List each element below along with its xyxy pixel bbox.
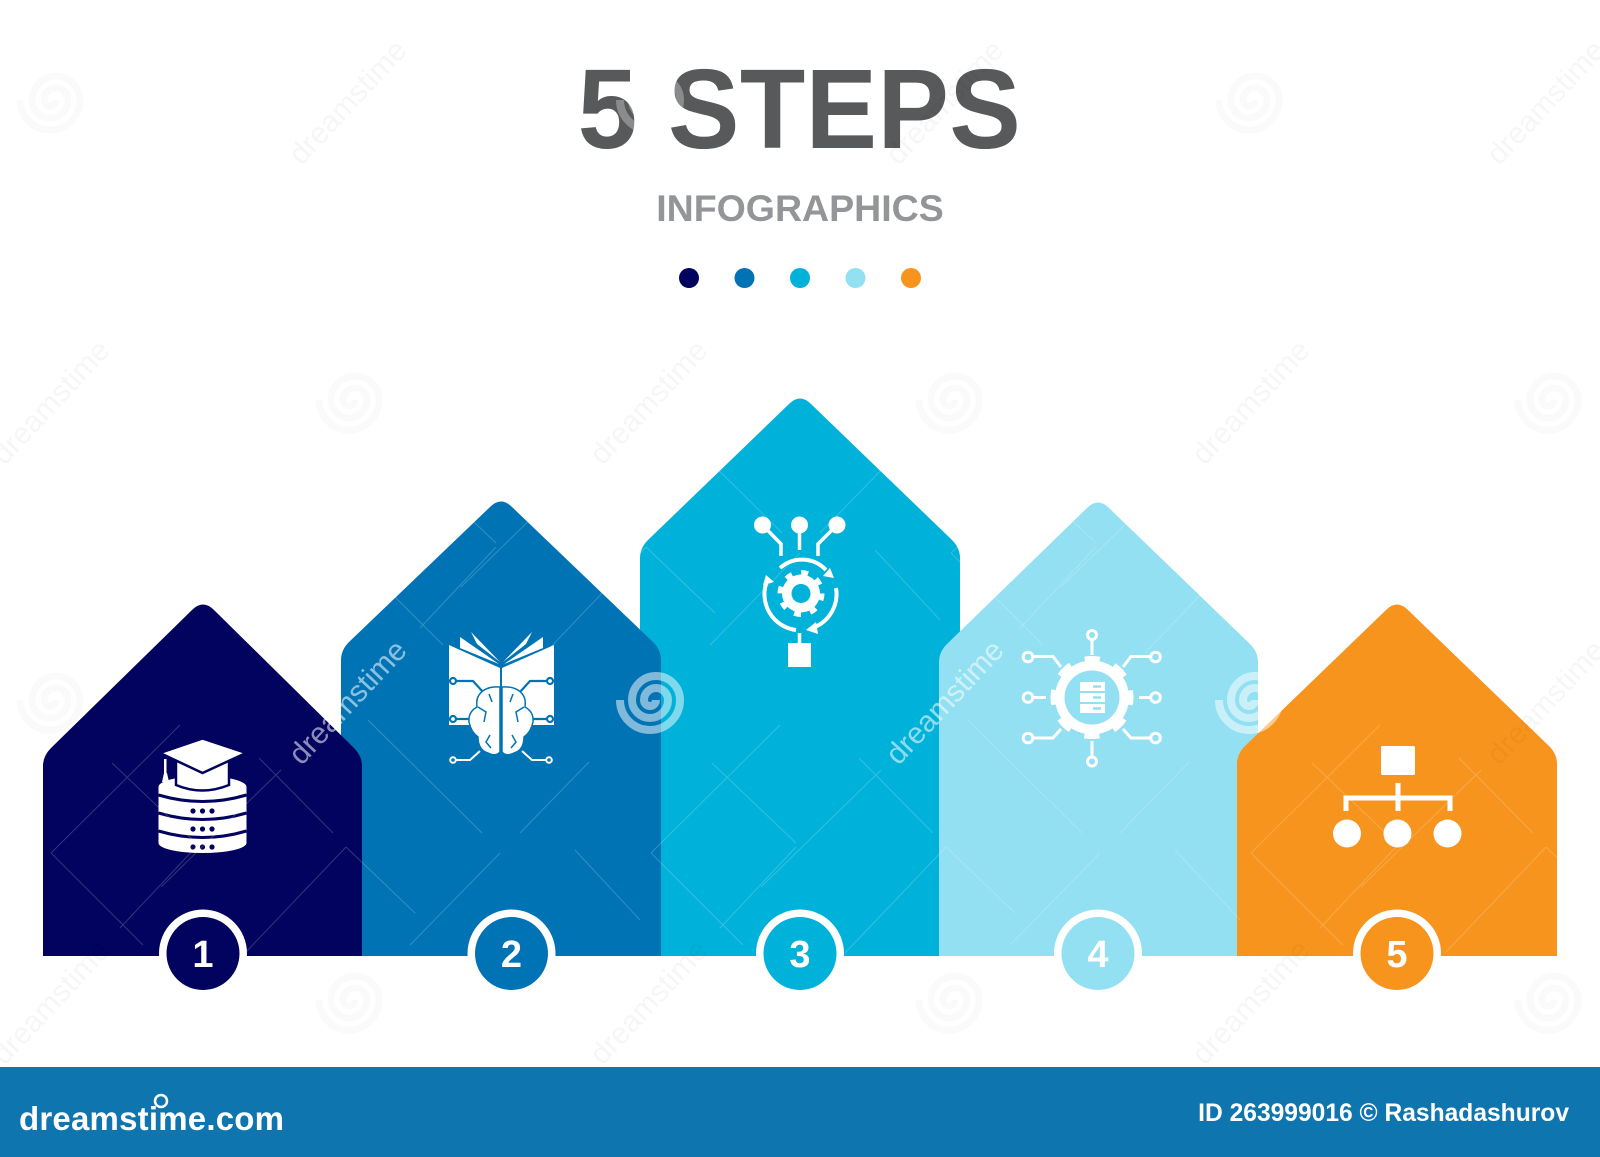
panel: step 5 arrow shape [1237, 604, 1557, 956]
icon: open book with circuit brain [449, 632, 554, 763]
badge: step 2: 2 [501, 934, 522, 976]
badge: step 5: 5 [1386, 934, 1408, 976]
watermark overlay: dreamstime [584, 334, 715, 471]
watermark overlay: dreamstime [283, 34, 414, 171]
watermark overlay: dreamstime [1186, 334, 1317, 471]
icon: gear cycle with nodes [754, 516, 846, 667]
badge: step 3 [756, 910, 844, 998]
watermark overlay: dreamstime [1186, 934, 1317, 1071]
watermark overlay: dreamstime [584, 934, 715, 1071]
badge: step 4: 4 [1087, 934, 1109, 976]
panel: step 3 arrow shape [640, 398, 960, 956]
badge: step 4 [1054, 910, 1142, 998]
badge: step 2 [468, 910, 556, 998]
watermark overlay: dreamstime [880, 634, 1011, 771]
watermark overlay: dreamstime [283, 634, 414, 771]
badge: step 3: 3 [789, 934, 811, 976]
watermark overlay: dreamstime [880, 34, 1011, 171]
panel: step 2 arrow shape [341, 502, 661, 956]
badge: step 1: 1 [192, 934, 214, 976]
icon: server gear network [1023, 630, 1160, 766]
badge: step 5 [1353, 910, 1441, 998]
subtitle: INFOGRAPHICS [656, 187, 944, 229]
panel: step 1 arrow shape [43, 604, 362, 956]
title: 5 STEPS [578, 46, 1021, 173]
footer image id and author: ID 263999016 © Rashadashurov [1198, 1100, 1569, 1127]
icon: hierarchy chart [1333, 746, 1462, 848]
panel: step 4 arrow shape [939, 502, 1258, 956]
icon: database with graduation cap [158, 738, 246, 853]
badge: step 1 [159, 910, 247, 998]
footer logo spiral [155, 1095, 167, 1107]
footer bar [0, 1067, 1600, 1157]
footer logo wordmark: dreamstime.com [19, 1100, 284, 1137]
color legend dots [679, 268, 921, 288]
